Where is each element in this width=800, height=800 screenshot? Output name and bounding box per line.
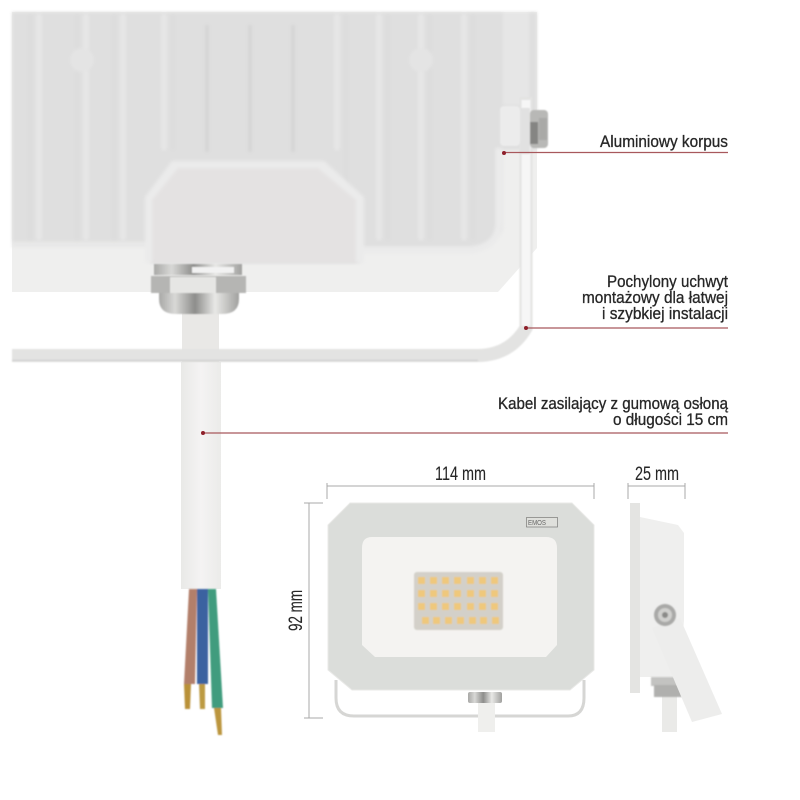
blue wire	[197, 589, 208, 709]
brown wire	[184, 589, 197, 709]
side body	[640, 517, 684, 677]
main photo: lamp housing rear	[12, 12, 537, 292]
callout: tilted bracket	[524, 272, 728, 330]
front gland	[468, 692, 502, 703]
front view of floodlight	[328, 503, 594, 732]
callout: power cable: Kabel zasilający z gumową osłoną	[498, 394, 728, 413]
main photo: side bolt	[500, 106, 548, 154]
green wire	[208, 589, 223, 735]
dimension: depth 25 mm	[628, 464, 685, 499]
callout: power cable: o długości 15 cm	[613, 410, 728, 429]
side bracket arm	[652, 618, 722, 722]
side cable	[662, 695, 677, 732]
callout: tilted bracket: i szybkiej instalacji	[602, 304, 728, 323]
dimension: height 92 mm	[286, 503, 323, 718]
front bracket	[336, 680, 584, 716]
front diffuser	[362, 537, 557, 657]
side front plate	[630, 503, 640, 693]
callout: aluminium housing	[502, 132, 728, 155]
dimension: depth 25 mm: 25 mm	[635, 464, 679, 485]
LED module	[414, 572, 503, 630]
side gland	[651, 677, 682, 697]
callout: tilted bracket: montażowy dla łatwej	[582, 288, 728, 307]
callout: tilted bracket: Pochylony uchwyt	[607, 272, 728, 291]
callout: aluminium housing: Aluminiowy korpus	[600, 132, 728, 151]
dimension: width 114 mm	[327, 464, 594, 499]
main photo: metal cable gland	[151, 264, 246, 314]
dimension: height 92 mm: 92 mm	[286, 590, 307, 631]
callout: power cable	[201, 394, 728, 435]
side view of floodlight	[630, 503, 722, 732]
side bolt	[654, 604, 676, 626]
logo label: EMOS	[528, 520, 546, 527]
front cable	[478, 700, 495, 732]
main photo: power cable	[181, 310, 221, 589]
front housing	[328, 503, 594, 690]
logo label	[526, 518, 558, 527]
main photo: tilted mounting bracket	[12, 97, 526, 360]
electrical wires	[184, 589, 223, 735]
main photo: terminal box	[145, 161, 364, 263]
dimension: width 114 mm: 114 mm	[435, 464, 486, 485]
